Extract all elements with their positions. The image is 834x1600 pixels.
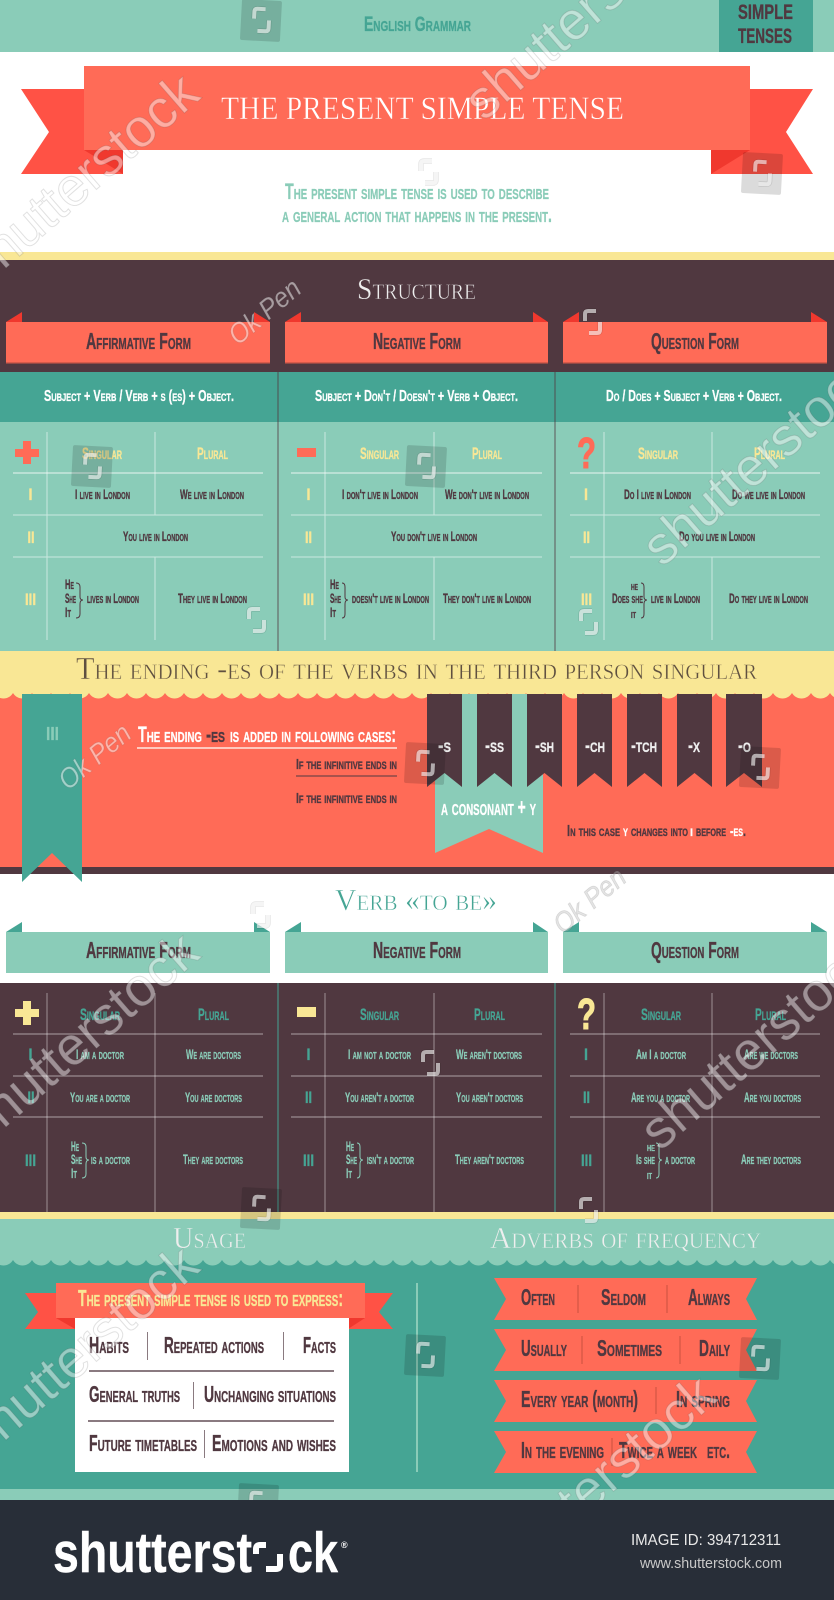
table: affirmative: I [28,1045,32,1064]
table: affirmative: Singular [80,1005,120,1024]
table: question: Am I a doctor [636,1046,686,1062]
table: negative: I [306,485,310,504]
table: question [577,990,801,1182]
table: question: he [647,1140,655,1154]
text: y changes into i: In this case [567,823,620,840]
tag: simple tenses [719,0,813,52]
label: English Grammar: English Grammar [364,13,471,36]
adverb ribbon 4: In the evening [521,1437,604,1463]
footer logo: ® [341,1540,348,1550]
table: negative: I am not a doctor [348,1046,411,1062]
yellow divider [0,1212,834,1219]
table: negative: II [305,1088,312,1107]
panel: structure tables [0,372,834,651]
ribbon: question form [563,312,827,364]
panel: formula band: Subject + Don't / Doesn't + Verb + Object. [315,388,518,405]
ribbon: affirmative form [6,922,270,973]
text: cases rule: If the infinitive ends in [296,790,397,807]
table: affirmative: We are doctors [186,1046,241,1062]
table: negative: It [346,1165,352,1181]
table: question: Do you live in London [679,528,755,544]
icon: question mark: ? [577,990,596,1039]
table: negative: We aren't doctors [456,1046,522,1062]
adverb ribbon 2 [494,1329,757,1371]
watermarks: Ok Pen [547,861,632,940]
table: negative: III [303,1151,314,1170]
text: cases rule: If the infinitive ends in [296,756,397,773]
text: y changes into i: . [743,823,746,840]
footer logo: ck [288,1521,338,1585]
ribbon: affirmative form [6,312,270,364]
icon: plus [15,441,39,464]
adverb ribbon 1 [494,1278,757,1320]
ending flags: -ss [485,735,504,757]
mint flag: consonant + y: a consonant + y [441,794,536,820]
table: question: Are you a doctor [631,1089,690,1105]
table: negative: He [346,1138,354,1154]
adverb ribbon 1: Always [688,1284,730,1310]
table: question: a doctor [665,1151,695,1167]
usage ribbon [25,1283,393,1329]
table: negative: She [346,1151,357,1167]
panel: formula band: Subject + Verb / Verb + s (es) + Object. [44,388,234,405]
footer logo: shutterst [53,1521,252,1585]
table: question: II [583,528,590,547]
image id: www.shutterstock.com [639,1555,782,1572]
table: question: Singular [641,1005,681,1024]
icon: plus [15,1001,39,1025]
tag: simple tenses: TENSES [738,25,792,48]
adverb ribbon 4: etc. [707,1437,730,1463]
ribbon: negative form: Negative Form [373,937,461,963]
table: question: he [631,579,638,593]
watermarks: Ok Pen [52,717,137,796]
table: affirmative: He [65,576,74,592]
table: affirmative: She [65,590,76,606]
usage card: Emotions and wishes [212,1430,336,1456]
table grid lines [13,432,820,640]
table: question: Plural [755,1005,786,1024]
table: affirmative: III [25,1151,36,1170]
icon: question mark: ? [577,429,596,478]
ribbon: negative form [285,312,548,364]
ribbon: affirmative form: Affirmative Form [86,937,191,963]
text: cases rule: The ending [138,722,202,747]
ribbon: negative form [285,922,548,973]
table: affirmative: is a doctor [91,1151,130,1167]
table: affirmative: I am a doctor [76,1046,124,1062]
table: negative: I don't live in London [342,486,418,502]
table: negative: Plural [474,1005,505,1024]
table: question: it [631,607,636,621]
table: question: it [647,1168,652,1182]
ribbon: question form [563,922,827,973]
bookmark: III [22,694,82,882]
ending flags: -s [438,735,451,757]
table grid lines [47,993,712,1212]
table: negative: You don't live in London [391,528,477,544]
text: y changes into i: changes into [631,823,688,840]
panel: verb to be tables [0,983,834,1212]
table: question: Singular [638,444,678,463]
image id [631,1532,782,1572]
ending flags [427,694,762,787]
table: affirmative: I live in London [75,486,130,502]
table: negative: They aren't doctors [455,1151,524,1167]
table: question: III [581,1151,592,1170]
table: affirmative [15,441,247,620]
ribbon: affirmative form: Affirmative Form [86,328,191,354]
table: negative: Singular [360,444,399,463]
table: negative [297,444,531,620]
table: negative: isn't a doctor [367,1151,414,1167]
table: affirmative: Plural [197,444,228,463]
heading: verb to be: Verb «to be» [335,882,497,917]
center divider [416,1283,418,1472]
panel: ending -es [0,650,834,882]
panel: usage and adverbs [0,1219,834,1500]
adverb ribbon 3: In spring [676,1386,730,1412]
heading: usage: Usage [173,1220,246,1255]
usage card: Facts [303,1332,336,1358]
table: negative: Plural [472,444,502,463]
icon: minus [297,448,316,457]
table: affirmative: She [71,1151,82,1167]
table: question: Do I live in London [624,486,691,502]
adverb ribbon 3: Every year (month) [521,1386,638,1412]
adverb ribbon 4 [494,1431,757,1473]
table: negative: You aren't a doctor [345,1089,414,1105]
panel: formula band [0,372,834,422]
table: negative: It [330,604,336,620]
adverb ribbon 3 [494,1380,757,1422]
table: question: Is she [636,1151,655,1167]
table: affirmative: III [25,590,36,609]
intro text: The present simple tense is used to describe [285,179,549,204]
heading: adverbs of frequency: Adverbs of frequency [490,1220,761,1255]
usage card: Future timetables [89,1430,197,1456]
ending flags: -x [688,735,700,757]
text: y changes into i [567,823,746,840]
table: affirmative: We live in London [180,486,244,502]
adverb ribbon 2: Sometimes [597,1335,662,1361]
table: question: live in London [651,590,700,606]
text: y changes into i: i [690,823,693,840]
usage card [75,1318,349,1472]
panel: verb to be header [6,882,827,973]
panel: structure [0,260,834,372]
table: question: Plural [754,444,785,463]
ending flags: -tch [631,735,657,757]
table: negative: They don't live in London [443,590,531,606]
table: question: Does she [612,590,643,606]
adverb ribbon 2: Usually [521,1335,567,1361]
footer [0,1500,834,1600]
table: negative [297,1005,524,1181]
table: negative: Singular [360,1005,399,1024]
usage ribbon: The present simple tense is used to express: [78,1285,343,1311]
usage card: Unchanging situations [204,1381,336,1407]
table: question [577,429,808,621]
table: affirmative: lives in London [87,590,139,606]
table: negative: II [305,528,312,547]
usage card: General truths [89,1381,180,1407]
ribbon: question form: Question Form [651,937,739,963]
table: negative: We don't live in London [445,486,529,502]
ending flags: -ch [585,735,605,757]
title: THE PRESENT SIMPLE TENSE [221,91,624,127]
table: affirmative [15,1001,243,1181]
intro text [282,179,552,227]
tag: simple tenses: SIMPLE [738,1,793,24]
table: question: III [581,590,592,609]
table: question: II [583,1088,590,1107]
table: affirmative: You are doctors [185,1089,242,1105]
watermarks: Ok Pen [222,272,307,351]
text: cases rule: -es [206,722,225,747]
yellow divider [0,252,834,260]
ending flags: -o [738,735,751,757]
icon: minus [297,1007,316,1017]
table: affirmative: Plural [198,1005,229,1024]
text: y changes into i: before [696,823,726,840]
table: question: I [584,1045,588,1064]
header bar [0,0,834,52]
text: y changes into i: -es [730,823,743,840]
table: affirmative: It [71,1165,77,1181]
usage card: Repeated actions [164,1332,264,1358]
table: question: I [584,485,588,504]
table: affirmative: II [28,528,34,547]
title ribbon [21,66,813,174]
heading: ending -es: The ending -es of the verbs in the third person singular [76,650,757,686]
table: negative: You aren't doctors [456,1089,523,1105]
text: cases rule [137,722,397,807]
table: affirmative: It [65,604,71,620]
table: affirmative: You are a doctor [70,1089,130,1105]
watermarks: shutterstock [469,1363,727,1599]
table: negative: I [306,1045,310,1064]
table: affirmative: They are doctors [183,1151,243,1167]
table: negative: He [330,576,339,592]
table: negative: She [330,590,341,606]
table: affirmative: Singular [82,444,122,463]
text: cases rule: is added in following cases: [230,722,396,747]
heading: structure: Structure [357,271,476,306]
table: negative: III [303,590,314,609]
usage card: Habits [89,1332,129,1358]
table: affirmative: You live in London [123,528,188,544]
table: affirmative: II [28,1088,34,1107]
table: affirmative: I [28,485,32,504]
text: y changes into i: y [623,823,628,840]
adverb ribbon 1: Often [521,1284,555,1310]
adverb ribbon 2: Daily [699,1335,730,1361]
mint flag: consonant + y [435,694,543,853]
table: affirmative: They live in London [178,590,247,606]
intro text: a general action that happens in the present. [282,202,552,227]
image id: IMAGE ID: 394712311 [631,1532,781,1549]
table: negative: doesn't live in London [352,590,429,606]
bookmark: III: III [46,724,59,744]
adverb ribbon 1: Seldom [601,1284,646,1310]
ribbon: negative form: Negative Form [373,328,461,354]
ribbon: question form: Question Form [651,328,739,354]
ending flags: -sh [535,735,554,757]
adverb ribbon 4: Twice a week [619,1437,697,1463]
table: affirmative: He [71,1138,79,1154]
